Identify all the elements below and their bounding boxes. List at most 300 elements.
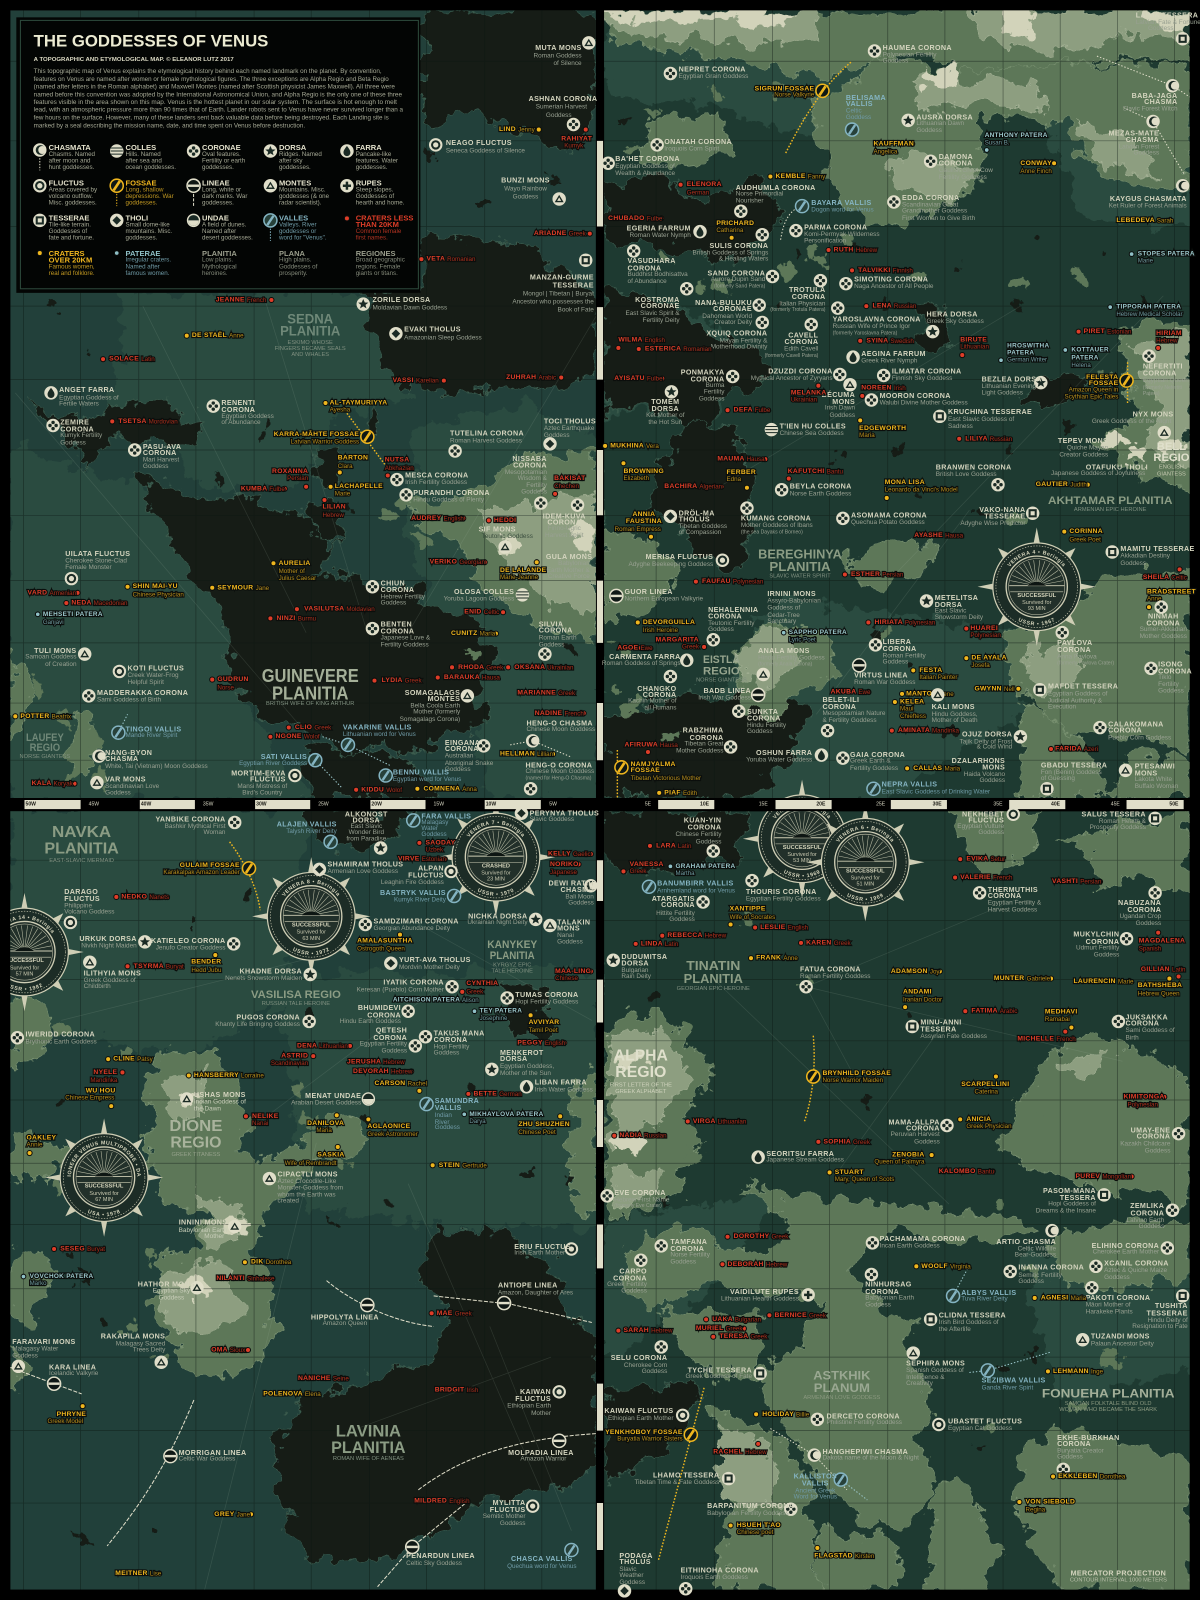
label: Rakapila Mons: Trees Deity (133, 1347, 166, 1354)
label: Koti Fluctus: KOTI FLUCTUS (128, 664, 184, 672)
label: Nefertiti Corona: Patera) (1143, 391, 1160, 397)
label: Magdalena: Spanish (1139, 945, 1162, 952)
label: Albys Vallis: ALBYS VALLIS (961, 1289, 1016, 1297)
label: Von Siebold: VON SIEBOLD (1026, 1499, 1075, 1506)
label: Vako-Nana Tesserae (960, 506, 1039, 527)
label: Badb Linea (698, 687, 765, 701)
label: Ausra Dorsa: AUSRA DORSA (916, 113, 973, 121)
label: Ushas Mons: Indian Goddess of (194, 1099, 246, 1106)
label: Kimitonga: KIMITONGA (1123, 1093, 1165, 1100)
label: Ubastet Fluctus: Egyptian Cat Goddess (948, 1425, 1012, 1432)
label: Alpan Fluctus: ALPAN (418, 864, 444, 872)
label: Hroswitha Patera: PATERA (1007, 350, 1034, 357)
label: Yanbike Corona: Woman (204, 829, 226, 836)
label: Derceto Corona (811, 1412, 902, 1426)
label: Dudumitsa Dorsa: Bulgarian (621, 967, 649, 974)
label: Saoday: SAODAY (426, 839, 456, 846)
label: Danilova (307, 1113, 344, 1134)
label: Xquiq Corona: Motherhood Divinity (711, 343, 768, 350)
label: Alajen Vallis (277, 820, 338, 848)
label: Silvia Corona: SILVIA (539, 620, 563, 628)
seal: Venera 8 (252, 857, 370, 968)
legend: tholi (110, 213, 172, 242)
seal: Venera 8: VENERA 8 • Beringia (282, 880, 340, 896)
label: Stuart: STUART (835, 1169, 864, 1176)
label: Rachel (713, 1441, 767, 1456)
label: Drol-Ma Tholus (664, 508, 727, 536)
intro paragraph: few hours on the surface. However, many of these landers sent back valuable data before being destroyed. Each Landing site is (34, 115, 389, 122)
label: Innini Mons: Babylonian Earth (179, 1227, 228, 1234)
label: Sunkta Corona: Goddess (747, 728, 773, 735)
label: Prichard (716, 220, 754, 240)
label: Bastryk Vallis (380, 889, 461, 904)
label: Becuma Mons: Irish Dawn (825, 405, 856, 412)
label: Cavell Corona (765, 318, 819, 359)
label: Bennu Vallis: Egyptian word for Venus (393, 776, 461, 783)
label: Mylitta Fluctus: FLUCTUS (490, 1506, 526, 1514)
label: Ninhursag Corona (865, 1268, 915, 1309)
legend: montes: MONTES (279, 178, 311, 187)
label: Yenkhoboy Fossae (605, 1428, 697, 1442)
label: Thouris Corona (745, 874, 821, 902)
label: Mooron Corona: Walubi Divine Mother Goddess (880, 400, 968, 407)
label: Veriko: VERIKO Georgian (430, 559, 485, 566)
label: Noreen: NOREEN Irish (861, 384, 906, 391)
label: Fatima: FATIMA Arabic (971, 1008, 1017, 1015)
region heading: Eistla Regio: NORSE GIANTESS (696, 678, 747, 684)
label: Stuart: Mary, Queen of Scots (835, 1176, 894, 1183)
label: Tamfana Corona: TAMFANA (670, 1238, 707, 1246)
intro paragraph: features on Venus are named after women or female mythological figures. The three exceptions are Alpha Regio and Beta Regio (34, 76, 389, 83)
title panel (16, 17, 420, 293)
label: Pakoti Corona: Harakeke Plants (1086, 1309, 1133, 1316)
legend: montes: Mountains. Misc. (279, 186, 326, 193)
label: Chiun Corona: Goddess (381, 600, 406, 607)
label: Iweridd Corona: Brythonic Earth Goddess (26, 1038, 97, 1045)
label: Idem-Kuva Corona: Harvest Spirit (545, 532, 584, 539)
label: Mafdet Tessera: Judicial Authority & (1048, 698, 1103, 705)
label: Hanghepiwi Chasma (808, 1448, 919, 1462)
label: Karen: KAREN Greek (806, 939, 852, 946)
label: Rabzhima Corona: Mother Goddess (676, 748, 723, 755)
label: Laima Tessera (1136, 11, 1200, 46)
label: Ninhursag Corona: Babylonian Earth (865, 1294, 915, 1301)
label: Dewi Ratih Chasma (548, 879, 598, 907)
label: Felesta Fossae: FELESTA (1086, 374, 1118, 381)
label: Aitchison Patera: AITCHISON PATERA Alison (393, 997, 479, 1003)
label: Kaiwan Fluctus: Mother (531, 1410, 552, 1417)
label: Nehalennia Corona: Goddess (708, 626, 734, 633)
label: Gulaim Fossae (163, 862, 256, 876)
label: Derceto Corona: DERCETO CORONA (827, 1412, 900, 1420)
region heading: Sedna Planitia (275, 311, 346, 358)
label: Nabuzana Corona (1118, 886, 1162, 927)
label: Nefertiti Corona (1142, 349, 1189, 397)
label: Bradstreet (1146, 588, 1197, 610)
label: Sigrun Fossae: SIGRUN FOSSAE (755, 85, 814, 92)
label: Ninmah Corona: Sumer-Akkadian (1140, 626, 1187, 633)
label: Aurelia: Mother of (279, 568, 305, 575)
label: Teresa: TERESA Greek (719, 1333, 768, 1340)
legend: regiones: REGIONES (356, 249, 396, 258)
label: Manzan-Gurme: Ancestor who possesses the (512, 299, 594, 306)
seal: Venera 14: 57 MIN (16, 971, 33, 977)
label: Gaia Corona: GAIA CORONA (850, 751, 905, 759)
label: Magdalena: MAGDALENA (1139, 937, 1185, 944)
label: Ruth: RUTH Hebrew (834, 247, 878, 254)
label: Xantippe (728, 906, 775, 927)
label: Mehseti Patera: MEHSETI PATERA (43, 611, 103, 618)
region heading: Vasilisa Regio: VASILISA REGIO (251, 989, 341, 1001)
label: Mikhaylova Patera (462, 1111, 544, 1125)
region heading: Fonueha Planitia (1042, 1387, 1175, 1413)
label: Heng-O Corona (524, 761, 594, 796)
region heading: Navka Planitia: NAVKA (52, 824, 111, 841)
label: Baba-Jaga Chasma: CHASMA (1144, 98, 1178, 106)
label: Hippolyta Linea: HIPPOLYTA LINEA (311, 1313, 379, 1321)
label: Heng-O Corona: HENG-O CORONA (526, 761, 592, 769)
label: Manzan-Gurme: MANZAN-GURME (530, 274, 594, 282)
scale bars: 35E (993, 802, 1003, 808)
label: Mezas-Mate Chasma: CHASMA (1126, 136, 1159, 144)
label: Qetesh Corona: Egyptian Fertility (360, 1040, 408, 1047)
label: Ushas Mons: the Dawn (194, 1106, 221, 1113)
label: Ilmatar Corona (877, 367, 961, 382)
legend: regiones: regions. Female (356, 263, 401, 270)
label: Ashnan Corona: Sumerian Harvest (536, 104, 587, 111)
label: Yanbike Corona: Bashkir Mythical First (165, 823, 226, 830)
legend: fossae: goddesses. (126, 200, 158, 207)
label: Alkonost Dorsa (345, 810, 388, 855)
legend: fluctus: FLUCTUS (49, 178, 84, 187)
label: Birute (960, 336, 989, 358)
label: Ausra Dorsa (901, 113, 973, 134)
label: De Ayala (964, 655, 1007, 669)
label: Medhavi: MEDHAVI (1045, 1009, 1078, 1016)
label: Nang-Byon Chasma (92, 749, 208, 770)
region heading: Fonueha Planitia: WOMAN WHO BECAME THE SHARK (1059, 1407, 1157, 1413)
label: Devorguilla (635, 619, 695, 634)
label: Bezlea Dorsa: Lithuanian Evening (982, 383, 1037, 390)
label: Ngone: NGONE Wolof (276, 733, 320, 740)
label: Zenobia: Queen of Palmyra (874, 1159, 925, 1166)
legend: dorsa: DORSA (279, 143, 307, 152)
label: Kimitonga (1123, 1093, 1167, 1109)
legend: plana: PLANA (279, 249, 306, 258)
label: Libera Corona: Roman Fertility (883, 653, 927, 660)
label: Tuzandi Mons: Palaun Ancestor Deity (1091, 1340, 1155, 1347)
label: Dzalarhons Mons: MONS (982, 763, 1005, 771)
label: Menkerot Dorsa: Mother of the Sun (500, 1070, 551, 1077)
label: Cavell Corona: CAVELL (788, 332, 819, 340)
label: Hellman: HELLMAN Lillian (500, 751, 554, 758)
label: Vovchok Patera: Marko (30, 1280, 47, 1287)
label: Sheila: SHEILA Celtic (1143, 574, 1187, 581)
label: Sand Corona (708, 269, 779, 290)
label: Corinna: CORINNA (1069, 528, 1103, 535)
label: Onatah Corona (650, 138, 732, 152)
label: Irnini Mons: Assyro-Babylonian (767, 598, 821, 605)
label: Belisama Vallis (846, 94, 886, 136)
label: Bayara Vallis: Dogon word for Venus (811, 207, 874, 214)
label: Oakley: Annie (27, 1141, 43, 1148)
region heading: Sedna Planitia: PLANITIA (280, 324, 340, 340)
label: Elihino Corona (1092, 1241, 1174, 1256)
label: Inanna Corona: Goddess (1018, 1278, 1044, 1285)
label: Virve: VIRVE Estonian (398, 856, 446, 863)
label: Alpan Fluctus: Leaghin Fire Goddess (381, 879, 444, 886)
label: Huarei (964, 625, 1001, 639)
label: Kumang Corona: (the sea Dayaks of Borneo) (741, 530, 803, 536)
scale bars: 20W (371, 802, 382, 808)
label: Ponmakya Corona: Burma (706, 382, 725, 389)
label: Kumang Corona: Mother Goddess of Ibans (741, 522, 813, 529)
region heading: Tinatin Planitia: TINATIN (686, 958, 740, 973)
label: Umay-Ene Corona (1120, 1127, 1185, 1155)
label: Mafdet Tessera: Egyptian Goddess of (1048, 690, 1108, 697)
legend: small craters: Common female (356, 228, 402, 235)
label: Damona Corona: Fertility Goddess (939, 174, 987, 181)
label: Antiope Linea: Amazon, Daughter of Ares (498, 1289, 573, 1296)
label: Yurt-Ava Tholus: YURT-AVA THOLUS (399, 956, 471, 964)
label: Vasudhara Corona: of Abundance (628, 278, 667, 285)
seal: Venera 4: Survived for (1022, 600, 1052, 606)
seal: Venera 8: 63 MIN (302, 936, 320, 942)
label: Salus Tessera: Roman Health & (1099, 818, 1147, 825)
label: Laurencin: LAURENCIN Marie (1073, 978, 1134, 985)
label: Tamfana Corona: Goddess (670, 1259, 696, 1266)
label: Ekhe-Burkhan Corona: Goddess (1057, 1454, 1083, 1461)
label: Sappho Patera: Lyric Poet (789, 636, 816, 643)
label: Bunzi Mons (501, 177, 566, 206)
label: Aminata: AMINATA Mandinka (898, 727, 960, 734)
label: Saoday (417, 839, 456, 854)
legend: chasmata: after moon and (49, 158, 91, 165)
seal: Venera 6: USSR • 1969 (847, 893, 883, 901)
region heading: Bereghinya Planitia: BEREGHINYA (758, 547, 842, 562)
label: Carpo Corona: Greek Fertility (607, 1281, 648, 1288)
label: Bradstreet: BRADSTREET (1147, 588, 1197, 595)
label: Vako-Nana Tesserae: TESSERAE (984, 512, 1026, 520)
label: Haumea Corona: HAUMEA CORONA (883, 44, 952, 52)
region heading: Lavinia Planitia: PLANITIA (331, 1439, 406, 1457)
legend: regiones: Broad geographic (356, 257, 405, 264)
label: Roxanna: Persian (287, 475, 309, 482)
label: Vasudhara Corona: VASUDHARA (628, 257, 676, 265)
label: Pasu-Ava Corona: CORONA (143, 449, 177, 457)
label: Nyele (90, 1069, 125, 1084)
label: Parma Corona: Personification (804, 237, 847, 244)
legend: paterae: famous women. (126, 270, 170, 277)
label: Darago Fluctus: Volcano Goddess (64, 909, 115, 916)
label: Takus Mana Corona: Hopi Fertility (434, 1043, 470, 1050)
label: Hera Dorsa (926, 310, 984, 338)
label: Birute: Lithuanian (960, 343, 989, 350)
label: Belet-Ili Corona: Mesopotamian Nature (822, 710, 886, 717)
label: Tsetsa: TSETSA Mordovian (118, 418, 178, 425)
label: Nissaba Corona (505, 455, 548, 510)
region heading: Alpha Regio: GREEK ALPHABET (615, 1089, 667, 1095)
label: Belisama Vallis: VALLIS (846, 100, 873, 108)
label: Manzan-Gurme: Mongol | Tibetan | Buryat (523, 290, 594, 297)
label: Lachapelle (328, 483, 383, 497)
label: Umay-Ene Corona: Goddess (1145, 1148, 1170, 1155)
label: Zenobia: ZENOBIA (892, 1152, 924, 1159)
label: Mikhaylova Patera: Darya (469, 1118, 486, 1125)
label: Cipactli Mons: Aztec Crocodile-Like (278, 1178, 337, 1185)
label: Holiday: HOLIDAY Billie (762, 1411, 810, 1418)
label: Ptesanwi Mons (1119, 762, 1179, 790)
label: Tuzandi Mons: TUZANDI MONS (1091, 1333, 1150, 1341)
label: Changko Corona: CORONA (643, 691, 677, 699)
label: Callas: CALLAS Maria (913, 765, 961, 772)
label: Vanessa: VANESSA (630, 861, 664, 868)
label: Elenora: German (687, 189, 710, 196)
label: Nabuzana Corona: Ugandan Crop (1120, 913, 1162, 920)
label: Hiriam (1156, 330, 1182, 351)
label: Lydia: LYDIA Greek (382, 677, 422, 684)
label: Kelea: Maui (900, 706, 913, 713)
label: Bayara Vallis (796, 199, 874, 214)
label: Brynhild Fossae: Norse Warrior Maiden (822, 1077, 884, 1084)
label: Tumas Corona: Hopi Fertility Goddess (515, 999, 578, 1006)
label: Yurt-Ava Tholus: Mordvin Mother Deity (399, 964, 461, 971)
label: Irnini Mons: Sanctuary (767, 618, 797, 625)
label: Xquiq Corona (706, 316, 769, 350)
label: Sulis Corona: British Goddess of Springs (693, 250, 768, 257)
label: Menat Undae (291, 1092, 375, 1107)
label: Namjyalma Fossae (615, 761, 701, 782)
label: Tutelina Corona: TUTELINA CORONA (450, 430, 524, 438)
label: Tuli Mons: TULI MONS (34, 647, 77, 655)
label: Seoritsu Farra: Japanese Stream Goddess (766, 1157, 844, 1164)
label: Samdzimari Corona: Georgian Abundance Deity (373, 925, 451, 932)
label: Tepev Mons: TEPEV MONS (1058, 437, 1108, 445)
label: Haumea Corona: Polynesian Fertility (883, 52, 937, 59)
legend: planitia: Low plains. (202, 257, 233, 264)
label: Flagstad (814, 1545, 875, 1560)
label: Var Mons: Scandinavian Love (105, 783, 160, 790)
region heading: Alpha Regio: ALPHA (614, 1048, 668, 1065)
label: Virtus Linea: Roman War Goddess (854, 679, 915, 686)
label: Scarpellini: SCARPELLINI (961, 1081, 1009, 1088)
label: Gbadu Tessera: of Guessing (1041, 775, 1075, 782)
label: Hippolyta Linea (311, 1299, 379, 1327)
label: Kottauer Patera: Helena (1071, 362, 1091, 369)
label: Kaygus Chasmata: Ket Ruler of Forest Animals (1109, 203, 1187, 210)
label: Pasom-Mana Tessera: Dreams & the Insane (1036, 1208, 1096, 1215)
label: Amalasuntha: Ostrogoth Queen (357, 945, 405, 952)
label: Sephira Mons: Intelligence & (906, 1374, 945, 1381)
legend: small craters: first names. (356, 235, 388, 242)
label: Chiun Corona: CORONA (381, 586, 414, 594)
label: Fatua Corona: Roman Fertility Goddess (800, 973, 871, 980)
legend: dorsa: Ridges. Named (279, 151, 322, 158)
label: Morrigan Linea (164, 1449, 247, 1463)
label: Koti Fluctus (113, 664, 184, 686)
label: Nehalennia Corona: Teutonic Fertility (708, 620, 755, 627)
label: Festa: FESTA (919, 667, 942, 674)
label: Tushita Tesserae: TESSERAE (1146, 1309, 1188, 1317)
label: Michelle (1017, 1029, 1076, 1042)
label: Mehseti Patera: Ganjavi (43, 619, 64, 626)
label: Gula Mons: Earth Mother & (547, 567, 591, 574)
label: Ponmakya Corona: Fertility (704, 388, 725, 395)
label: Graham Patera (668, 863, 736, 877)
label: Edgeworth (858, 418, 906, 439)
label: Alkonost Dorsa: Wonder Bird (349, 829, 385, 836)
label: Manzan-Gurme: TESSERAE (553, 282, 594, 290)
label: Mona Lisa: Leonardo da Vinci's Model (885, 486, 958, 493)
label: Alkonost Dorsa: East Slavic (350, 823, 383, 830)
label: Pasu-Ava Corona: Mari Harvest (143, 457, 179, 464)
label: Fatua Corona (799, 965, 870, 993)
seal: Venera 7: VENERA 7 • Beringia (466, 820, 524, 837)
label: Egeria Farrum (627, 225, 707, 239)
label: Bachira: BACHIRA Algerian (664, 483, 723, 490)
legend: fluctus (33, 178, 98, 207)
label: Rakapila Mons: Malagasy Sacred (116, 1340, 166, 1347)
label: Rahiyat: RAHIYAT (561, 135, 593, 142)
label: Polenova: POLENOVA Elena (263, 1390, 321, 1397)
label: Pugos Corona: PUGOS CORONA (236, 1013, 300, 1021)
legend: colles: after sea and (126, 158, 162, 165)
label: Olosa Colles: Yoruba Lagoon Goddess (444, 595, 514, 602)
linear features (230, 61, 1128, 1561)
label: Karra-Mahte Fossae (274, 430, 374, 445)
label: Mamitu Tesserae: Akkadian Destiny (1120, 553, 1171, 560)
label: Meitner: MEITNER Lise (115, 1570, 162, 1577)
label: Sunkta Corona (732, 704, 787, 735)
label: Beyla Corona: BEYLA CORONA (790, 483, 852, 491)
label: Samundra Vallis: SAMUNDRA (435, 1097, 479, 1105)
label: Defa: DEFA Fulbe (734, 407, 771, 414)
label: Margarita (656, 636, 707, 650)
seal: Venera 7: USSR • 1970 (478, 888, 514, 896)
label: Tushita Tesserae: Resignation to Fate (1132, 1323, 1188, 1330)
label: Brynhild Fossae (807, 1070, 891, 1084)
label: Albys Vallis (947, 1289, 1016, 1302)
label: Molpadia Linea: Amazon Warrior (520, 1456, 567, 1463)
label: Mooron Corona: MOORON CORONA (880, 392, 951, 400)
seal: Venera 5: 53 MIN (793, 858, 811, 864)
label: Andami: ANDAMI (903, 988, 932, 995)
footer: projection (1070, 1569, 1167, 1584)
label: Seseg: SESEG Buryat (60, 1245, 105, 1252)
legend: valles: goddesses or (279, 228, 316, 235)
footer: projection: CONTOUR INTERVAL 1000 METERS (1070, 1578, 1167, 1584)
label: Ojuz Dorsa: & Cold Wind (977, 743, 1013, 750)
label: Nana-Buluku Coronae: Creator Deity (714, 319, 753, 326)
label: Medhavi: Ramabai (1045, 1016, 1070, 1023)
label: Pakoti Corona: Māori Mother of (1086, 1302, 1131, 1309)
legend: undae: Named after (202, 228, 236, 235)
label: Chiun Corona (366, 580, 426, 607)
legend: montes (264, 178, 330, 207)
scale bars: 20E (816, 802, 826, 808)
region heading: Sedna Planitia: FINGERS BECAME SEALS (275, 346, 346, 352)
label: Barpanitum Corona (707, 1502, 798, 1517)
label: Bakisat: Chechen (554, 483, 580, 490)
label: Namjyalma Fossae: Tibetan Victorious Mother (631, 775, 701, 782)
label: Piaf: PIAF Edith (664, 789, 698, 796)
label: Mae: MAE Greek (437, 1310, 473, 1317)
label: Gulaim Fossae: GULAIM FOSSAE (180, 862, 240, 869)
label: Faravari Mons (12, 1338, 76, 1373)
label: Hroswitha Patera (999, 342, 1049, 364)
label: Asomama Corona: Quechua Potato Goddess (851, 519, 925, 526)
label: Farida: FARIDA Azeri (1055, 745, 1098, 752)
